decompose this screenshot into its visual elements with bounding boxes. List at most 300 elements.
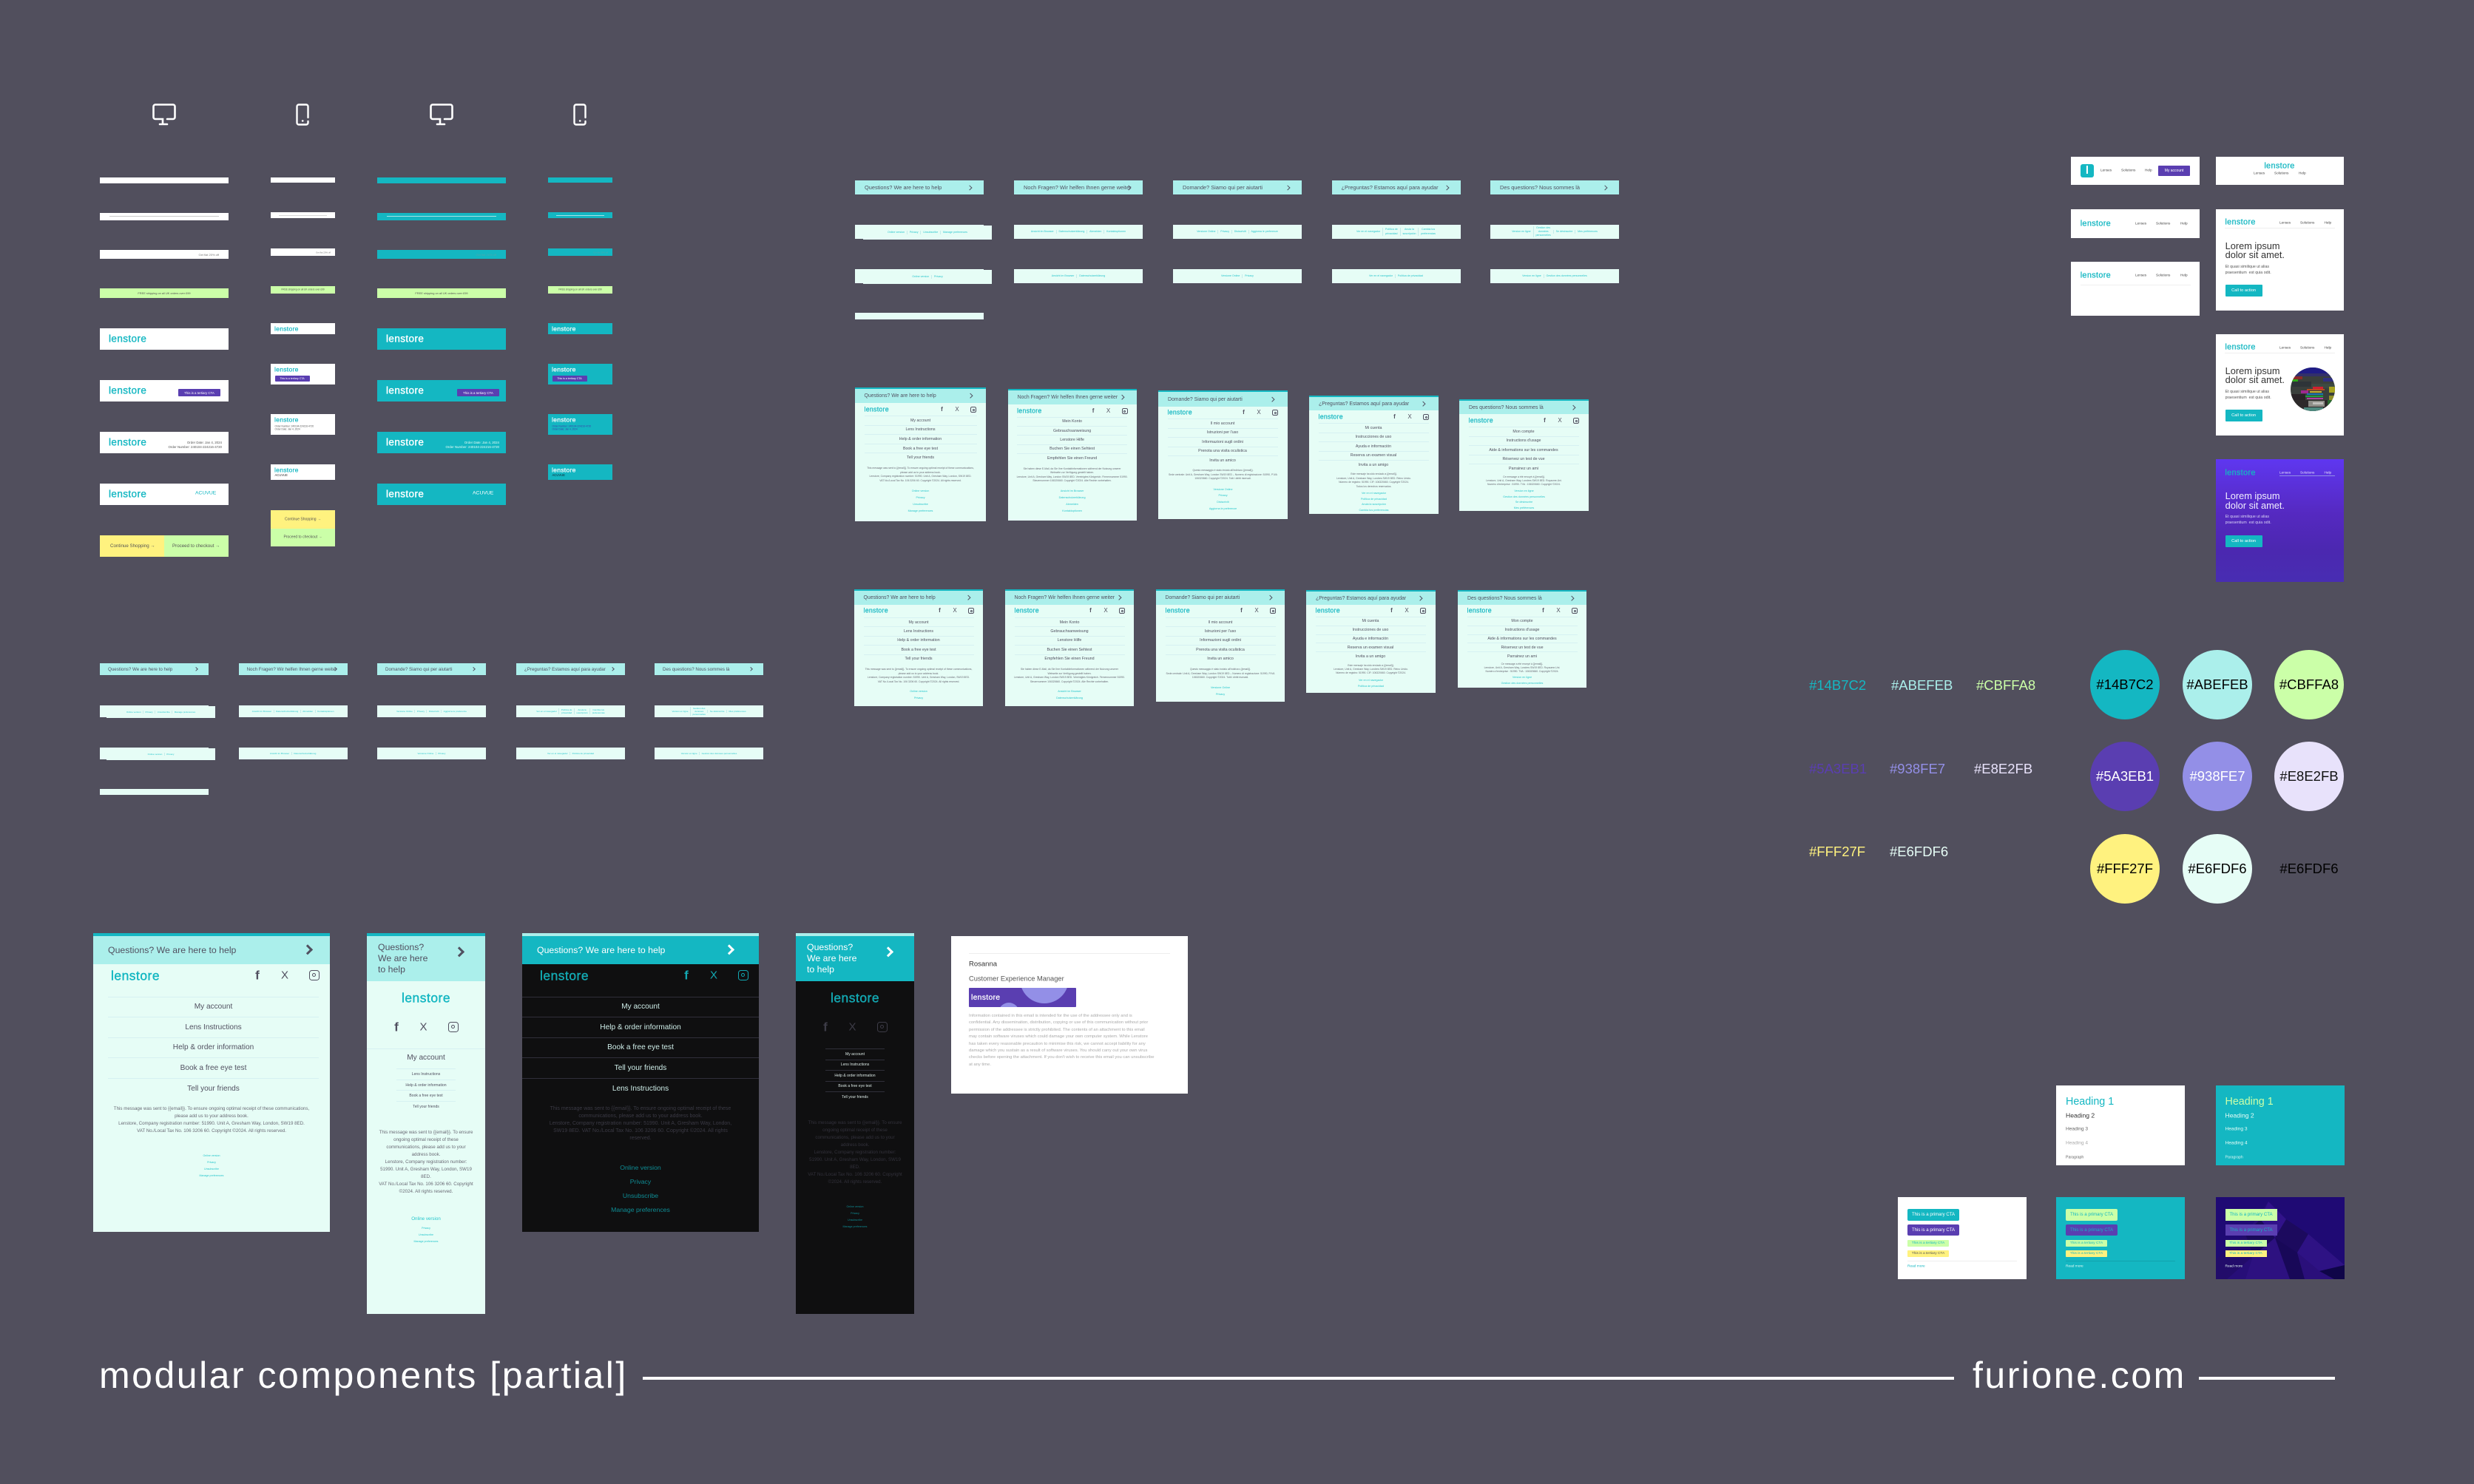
footer links, German medium: Abmelden [1089,230,1101,233]
menu: My account [195,1003,232,1011]
footer links [93,1152,330,1179]
swatch label: #E6FDF6 [1890,844,1948,859]
help bar, Italian medium [1173,180,1302,194]
footer links, English small: Privacy [146,711,153,714]
legal text: Lenstore, Unit A, Gresham Way, Londres SW19 8ED. Reino Unido. [1334,668,1408,671]
panel: nav header with divider: Help [2180,274,2188,277]
legal text: Este mensaje ha sido enviado a {{email}}. [1351,472,1397,475]
panel: nav icon with account button [2071,157,2200,185]
legal text: Este mensaje ha sido enviado a {{email}}. [1348,664,1394,667]
legal text: Steuernummer 106320660. Copyright ©2024. Alle Rechte vorbehalten. [1030,680,1109,683]
short footer links, Spanish small: Ver en el navegador [547,752,568,755]
swatch label: #ABEFEB [1891,677,1953,693]
panel: hero white with image [2216,334,2344,436]
nav links: Lenses [2279,345,2291,349]
nav links: Solutions [2300,471,2314,475]
social icons [1538,606,1579,615]
legal text: VAT No./Local Tax No. 106 3206 60. Copyright [808,1172,902,1177]
menu: Instrucciones de uso [1356,435,1391,439]
footer links, German medium [1014,225,1143,239]
footer links: Privacy [1218,494,1228,497]
menu: Tell your friends [907,455,934,460]
tertiary CTA green: This is a tertiary CTA [1912,1241,1944,1245]
footer links: Versione Online [1211,686,1230,689]
menu: Lens Instructions [904,629,933,634]
social icons: X [1106,407,1110,414]
logo header with order data, teal mobile: lenstore [552,416,576,424]
footer links: Política de privacidad [1358,685,1384,688]
footer links, Spanish small: Cambia tus [592,708,604,711]
short footer links, English medium back layer [855,269,984,283]
divider bar, white desktop [100,213,229,220]
CTA [2225,535,2262,547]
logo header with CTA, white desktop [100,380,229,402]
social icons [939,607,974,614]
help bar: Questions? We are here to help [537,945,665,955]
paragraph: praesentium est quia odit. [2225,396,2271,400]
logo header with CTA, white desktop: This is a tertiary CTA [184,390,214,395]
small footer links: Privacy [422,1227,430,1230]
social icons [1089,607,1125,614]
submenu: Book a free eye test [409,1094,443,1098]
colour circle #E6FDF6 [2183,834,2252,904]
legal text [796,1119,914,1186]
menu: Book a free eye test [838,1084,872,1088]
heading 2: Heading 2 [2225,1112,2254,1119]
menu [865,416,977,460]
social icons: X [1405,607,1409,614]
divider bar, white mobile [271,212,335,218]
legal text [1458,663,1586,674]
menu: Aide & informations sur les commandes [1489,448,1558,453]
legal text: Sie haben diese E-Mail, da Sie Ihre Kontaktinformationen während der Nutzung unserer [1024,467,1121,470]
footer links, German medium: Ansicht im Browser [1031,230,1054,233]
help bar, Spanish medium [1331,180,1460,194]
nav links: Help [2324,345,2331,349]
disclaimer text: may contain software viruses which could damage your own computer system. While Lenstore [969,1034,1148,1039]
short footer links, Italian medium: Privacy [1245,274,1254,277]
footer links, English medium [863,226,992,240]
help bar [796,933,914,981]
short footer links, French small: Version en ligne [681,752,697,755]
panel: centered nav header: Help [2299,172,2306,175]
swatch label: #938FE7 [1890,761,1945,776]
primary CTA teal: This is a primary CTA [1912,1212,1955,1217]
menu: Mi cuenta [1365,426,1382,430]
legal text: Numéro d'entreprise : 51990. TVA : 106320660. Copyright ©2024. [1486,670,1558,673]
footer links, English medium: Manage preferences [943,231,967,234]
footer links: Privacy [916,496,925,499]
logo header with CTA, teal mobile: This is a tertiary CTA [557,377,582,380]
panel: footer card English, row 1 [855,387,986,521]
menu [864,617,974,661]
help bar [1156,589,1285,605]
legal text: Lenstore, Unit A, Gresham Way, Londres SW19 8ED. Reino Unido. [1336,476,1411,479]
footer links, English small back layer [100,705,209,717]
logo header with CTA, teal desktop [377,380,506,402]
footer links, English medium: Privacy [910,231,919,234]
palette text swatches, row 3 [1809,841,2038,863]
menu: My account [845,1052,865,1057]
footer links, French medium: données [1538,230,1549,233]
nav links: Help [2324,220,2331,224]
footer links, Spanish small: Anula la [578,708,587,711]
footer links, Italian small: Privacy [417,710,425,713]
menu: Il mio account [1209,620,1232,625]
logo header with order data, white mobile: lenstore [274,416,299,424]
footer links: Mes préférences [1514,506,1534,509]
disclaimer text: damage which you sustain as a result of software viruses. You should carry out your own virus [969,1048,1147,1053]
help bar, French medium [1490,180,1619,194]
help bar: We are here [378,953,427,963]
logo: lenstore [2225,218,2256,227]
legal text: Lenstore, Company registration number: 51990. Unit A, Gresham Way, London, SW19 8ED. [118,1121,305,1126]
nav links [2279,220,2339,227]
legal text: Webseite zur Verfügung gestellt haben. [1047,671,1092,674]
menu: Help & order information [600,1023,681,1031]
small footer links: Unsubscribe [419,1233,433,1236]
footer links: Anula la suscripción [1362,503,1386,506]
promo banner, green mobile [271,286,335,294]
menu: Empfehlen Sie einen Freund [1044,657,1095,661]
legal text: This message was sent to {{email}}. To ensure [808,1120,902,1125]
footer links: Unsubscribe [204,1167,219,1170]
headline [2225,492,2299,510]
legal text: VAT No./Local Tax No. 106 3206 60. Copyright ©2024. All rights reserved. [879,479,961,482]
footer links: Online version [203,1153,220,1156]
menu: Il mio account [1211,421,1234,426]
footer links: Online version [846,1205,863,1208]
menu: My account [621,1003,660,1011]
footer links, English small: Online version [126,711,141,714]
legal text: Número de registro: 51990. CIF: 106320660. Copyright ©2024. [1336,671,1406,674]
menu: Informazioni sugli ordini [1202,440,1243,444]
footer links: Unsubscribe [913,503,928,506]
signature banner [969,988,1076,1007]
footer links, Spanish small: Ver en el navegador [536,710,557,713]
short footer links, French medium: Gestion des données personnelles [1546,274,1587,277]
menu [825,1048,885,1102]
footer links: Privacy [1216,693,1225,696]
social icons: f [1390,607,1393,614]
menu: Invita un amico [1207,657,1234,661]
legal text: This message was sent to {{email}}. To ensure ongoing optimal receipt of these communications, [114,1106,309,1111]
preheader, teal mobile [548,248,612,256]
tertiary CTA yellow: This is a tertiary CTA [1912,1252,1944,1256]
short footer links, English small: Online version [148,753,162,756]
logo header with Acuvue brand, teal desktop: ACUVUE [473,491,493,496]
menu: Prenota una visita oculistica [1198,449,1247,453]
menu [1467,617,1577,660]
icon: mobile column 2 [296,104,309,126]
short footer links, English medium: Privacy [934,275,943,278]
footer links: Ansicht im Browser [1058,690,1081,693]
help bar, German medium [1014,180,1143,194]
logo: lenstore [1318,413,1343,421]
menu: Instructions d'usage [1507,438,1541,443]
short footer links, Spanish small [516,748,625,759]
panel: hero white [2216,209,2344,311]
footer links, French small: Se désinscrire [710,710,725,713]
social icons: X [1254,607,1259,614]
logo header with CTA, white desktop: lenstore [109,384,146,396]
disclaimer text: checks before opening the attachment. If you don't wish to receive this email you can unsubscribe [969,1055,1155,1060]
nav links: Lenses [2100,169,2112,172]
footer links: Gestion des données personnelles [1503,495,1545,498]
menu: Aide & informations sur les commandes [1487,637,1557,641]
panel: type scale, white [2056,1085,2185,1165]
footer links: Unsubscribe [848,1219,862,1222]
split CTA, desktop [100,535,229,557]
nav links: Lenses [2279,471,2291,475]
panel: nav header with divider: Solutions [2156,274,2170,277]
paragraph: Paragraph [2066,1155,2083,1159]
social icons: X [1257,409,1261,416]
promo banner, green desktop variant: FREE shipping on all UK orders over £99 [415,291,468,295]
footer links: Privacy [914,697,923,699]
legal text: Lenstore, Company registration number: 51990. Unit A, Gresham Way, London, SW19 8ED. [868,676,970,679]
menu [108,997,319,1098]
social icons [249,967,322,983]
social icons: f [394,1020,399,1034]
menu: Buchen Sie einen Sehtest [1050,447,1095,451]
footer links [1306,678,1436,689]
help bar: Domande? Siamo qui per aiutarti [1166,595,1240,600]
help bar: ¿Preguntas? Estamos aquí para ayudar [1316,596,1406,600]
social icons: X [419,1020,427,1034]
legal text: VAT No./Local Tax No. 106 3206 60. Copyright ©2024. All rights reserved. [137,1128,286,1134]
preheader, teal desktop: Get flat 20% off [476,253,496,256]
stacked CTA, mobile: Proceed to checkout → [284,535,322,539]
logo header with CTA, teal desktop: This is a tertiary CTA [463,390,493,395]
help bar, English medium: Questions? We are here to help [865,184,942,191]
menu: Lenstore Hilfe [1058,638,1081,643]
legal text: This message was sent to {{email}}. To ensure [379,1130,473,1135]
legal text: ©2024. All rights reserved. [399,1189,453,1194]
colour circle #E8E2FB: #E8E2FB [2279,768,2339,784]
legal text: Sede centrale: Unit A, Gresham Way, London SW19 8ED – Numero di registrazione: 51990, P.IVA [1166,671,1274,674]
menu: Buchen Sie einen Sehtest [1047,648,1092,652]
tertiary CTA yellow [2066,1250,2107,1257]
short footer links, French medium: Version en ligne [1522,274,1541,277]
legal text: communications, please add us to your address book. [578,1114,703,1119]
help bar, Italian small [377,663,486,675]
nav links: Help [2324,471,2331,475]
social icons: f [684,969,689,982]
help bar, French small [655,663,763,675]
menu [1015,617,1125,661]
submenu: Tell your friends [413,1105,439,1109]
menu: Istruzioni per l'uso [1205,629,1236,634]
legal text: Número de registro: 51990. CIF: 106320660. Copyright ©2024. [1339,481,1409,484]
social icons: f [1393,413,1396,420]
menu: Book a free eye test [607,1043,674,1051]
menu [367,1048,485,1068]
CTA: Call to action [2231,413,2256,418]
social icons: X [281,969,288,982]
menu [1166,617,1276,661]
footer links [1056,690,1083,699]
legal text: address book. [841,1142,869,1148]
footer links, German small: Kontaktoptionen [317,710,334,713]
social icons [1240,607,1276,614]
footer links, German small: Datenschutzerklärung [276,710,298,713]
stacked CTA, mobile [271,510,335,546]
nav links: Lenses [2279,220,2291,224]
menu [1316,617,1426,659]
legal text [1014,668,1125,683]
footer links: Privacy [851,1211,859,1214]
footer links [1359,492,1389,512]
logo header with order data, teal mobile: Order Number: 240104-224216-4720 [552,424,591,427]
help bar [367,933,485,981]
paragraph: Paragraph [2225,1155,2243,1159]
logo header, white mobile [271,323,335,334]
promo banner, green desktop: FREE shipping on all UK orders over £99 [138,291,191,295]
footer links: Manage preferences [611,1205,670,1213]
footer links, Italian medium [1173,225,1302,239]
panel: centered nav header: lenstore [2264,161,2295,170]
empty footer strip medium [855,313,984,319]
logo: lenstore [2225,343,2256,352]
menu: Instrucciones de uso [1353,628,1388,632]
short footer links, German small [239,748,348,759]
logo header with order data, teal desktop: lenstore [386,436,424,447]
logo: lenstore [402,990,450,1005]
menu: Parrainez un ami [1509,467,1538,471]
panel: nav header with divider: Lenses [2135,274,2146,277]
heading 4: Heading 4 [2066,1140,2088,1145]
short footer links, German medium: Datenschutzerklärung [1079,274,1105,277]
small footer links [367,1225,485,1245]
short footer links, Italian small [377,748,486,759]
preheader, teal mobile: Get flat 20% off [593,251,608,254]
logo: lenstore [1017,407,1042,415]
tertiary CTA yellow [2225,1250,2266,1257]
legal text: ongoing optimal receipt of these [822,1128,888,1133]
footer links: Kontaktoptionen [1062,509,1082,512]
social icons [811,1019,899,1035]
footer links [1209,488,1237,510]
footer links, French small: Version en ligne [672,710,688,713]
short footer links, Italian medium: Versione Online [1221,274,1240,277]
glitch image circle [2291,367,2335,411]
help bar, Spanish medium: ¿Preguntas? Estamos aquí para ayudar [1342,184,1439,191]
panel: nav header: Help [2180,222,2188,226]
empty footer strip small [100,789,209,795]
footer links, Italian small: Aggiorna le preferenze [444,710,467,713]
panel: footer card German, row 1 [1008,389,1137,521]
logo header, white desktop [100,328,229,350]
panel: footer card Italian, row 2 [1156,589,1285,702]
legal text [1306,664,1436,675]
preheader, white mobile: Get flat 20% off [316,251,331,254]
nav links [2100,167,2152,175]
panel: large footer, light desktop [93,933,330,1232]
help bar: Noch Fragen? Wir helfen Ihnen gerne weiter [1015,595,1115,600]
help bar: Questions? We are here to help [108,945,236,955]
footer links, Spanish small: privacidad [561,711,572,714]
footer links, German small: Abmelden [303,710,313,713]
CTA: Call to action [2231,538,2256,543]
help bar: to help [378,964,405,975]
short footer links, Spanish medium: Ver en el navegador [1369,274,1393,277]
logo: lenstore [1469,417,1493,424]
menu: Ayuda e información [1353,637,1388,641]
help bar, German small: Noch Fragen? Wir helfen Ihnen gerne weiter [247,667,337,671]
legal text: reserved. [629,1136,652,1141]
menu: My account [908,620,929,625]
swatch label: #CBFFA8 [1976,677,2035,693]
footer links: Ansicht im Browser [1061,489,1084,492]
logo header with CTA, teal mobile: lenstore [552,366,576,373]
social icons: X [1558,417,1562,424]
footer links, Spanish medium: privacidad [1385,232,1398,235]
logo header, teal desktop [377,328,506,350]
menu [1319,423,1429,467]
footer links, Italian medium: Versione Online [1197,230,1215,233]
logo header with Acuvue brand, teal mobile: ACUVUE [552,473,565,477]
footer links, French small [655,705,763,717]
tertiary CTA yellow: This is a tertiary CTA [2070,1252,2103,1256]
legal text: 51990. Unit A, Gresham Way, London, SW19 [809,1157,901,1162]
panel: footer card German, row 2 [1005,589,1134,706]
social icons [1393,413,1429,420]
logo: lenstore [864,607,888,614]
footer links: Datenschutzerklärung [1056,697,1083,699]
menu: Lens Instructions [841,1063,869,1067]
headline: Lorem ipsum [2225,490,2280,501]
logo header with Acuvue brand, white mobile: lenstore [274,467,299,474]
menu: Reserva un examen visual [1348,646,1393,650]
panel: large footer, light mobile [367,933,485,1314]
panel: footer card English, row 2 [854,589,983,706]
menu: Tell your friends [905,657,933,661]
colour circle #5A3EB1: #5A3EB1 [2096,768,2154,784]
panel: centered nav header: Solutions [2274,172,2288,175]
spacer bar, white mobile [271,177,335,183]
legal text: Lenstore, Unit A, Gresham Way, London SW19 8ED. Vereinigtes Königreich. Firmennummer 51990. [1017,475,1128,478]
short footer links, English medium: Online version [912,275,929,278]
legal text: Questo messaggio è stato inviato all'indirizzo {{email}}. [1192,469,1254,472]
footer links, Italian small [377,705,486,717]
nav links: Solutions [2300,220,2314,224]
panel: nav header: lenstore [2081,219,2111,228]
paragraph: praesentium est quia odit. [2225,521,2271,525]
social icons: f [1544,417,1546,424]
spacer bar, teal mobile [548,177,612,183]
help bar, Spanish small: ¿Preguntas? Estamos aquí para ayudar [524,667,606,671]
help bar, English medium [855,180,984,194]
legal text: communications, please add us to your [815,1135,895,1140]
logo header, teal mobile: lenstore [552,325,576,332]
footer links, German small [239,705,348,717]
legal text: SW19 8ED. VAT No./Local Tax No. 106 3206 60. Copyright ©2024. All rights [553,1128,728,1134]
menu: Instructions d'usage [1505,628,1539,632]
read more link: Read more [2225,1265,2243,1269]
footer links, Spanish medium: Ver en el navegador [1356,230,1380,233]
legal text [1486,475,1562,486]
read more link: Read more [2066,1265,2083,1269]
short footer links, Italian medium [1173,269,1302,283]
help bar [1008,389,1137,404]
headline: Lorem ipsum [2225,240,2280,251]
spacer bar, teal desktop [377,177,506,183]
social icons: X [1556,607,1561,614]
paragraph [2225,389,2299,401]
website credit: furione.com [1973,1355,2186,1396]
footer links: Se désinscrire [1515,501,1532,504]
